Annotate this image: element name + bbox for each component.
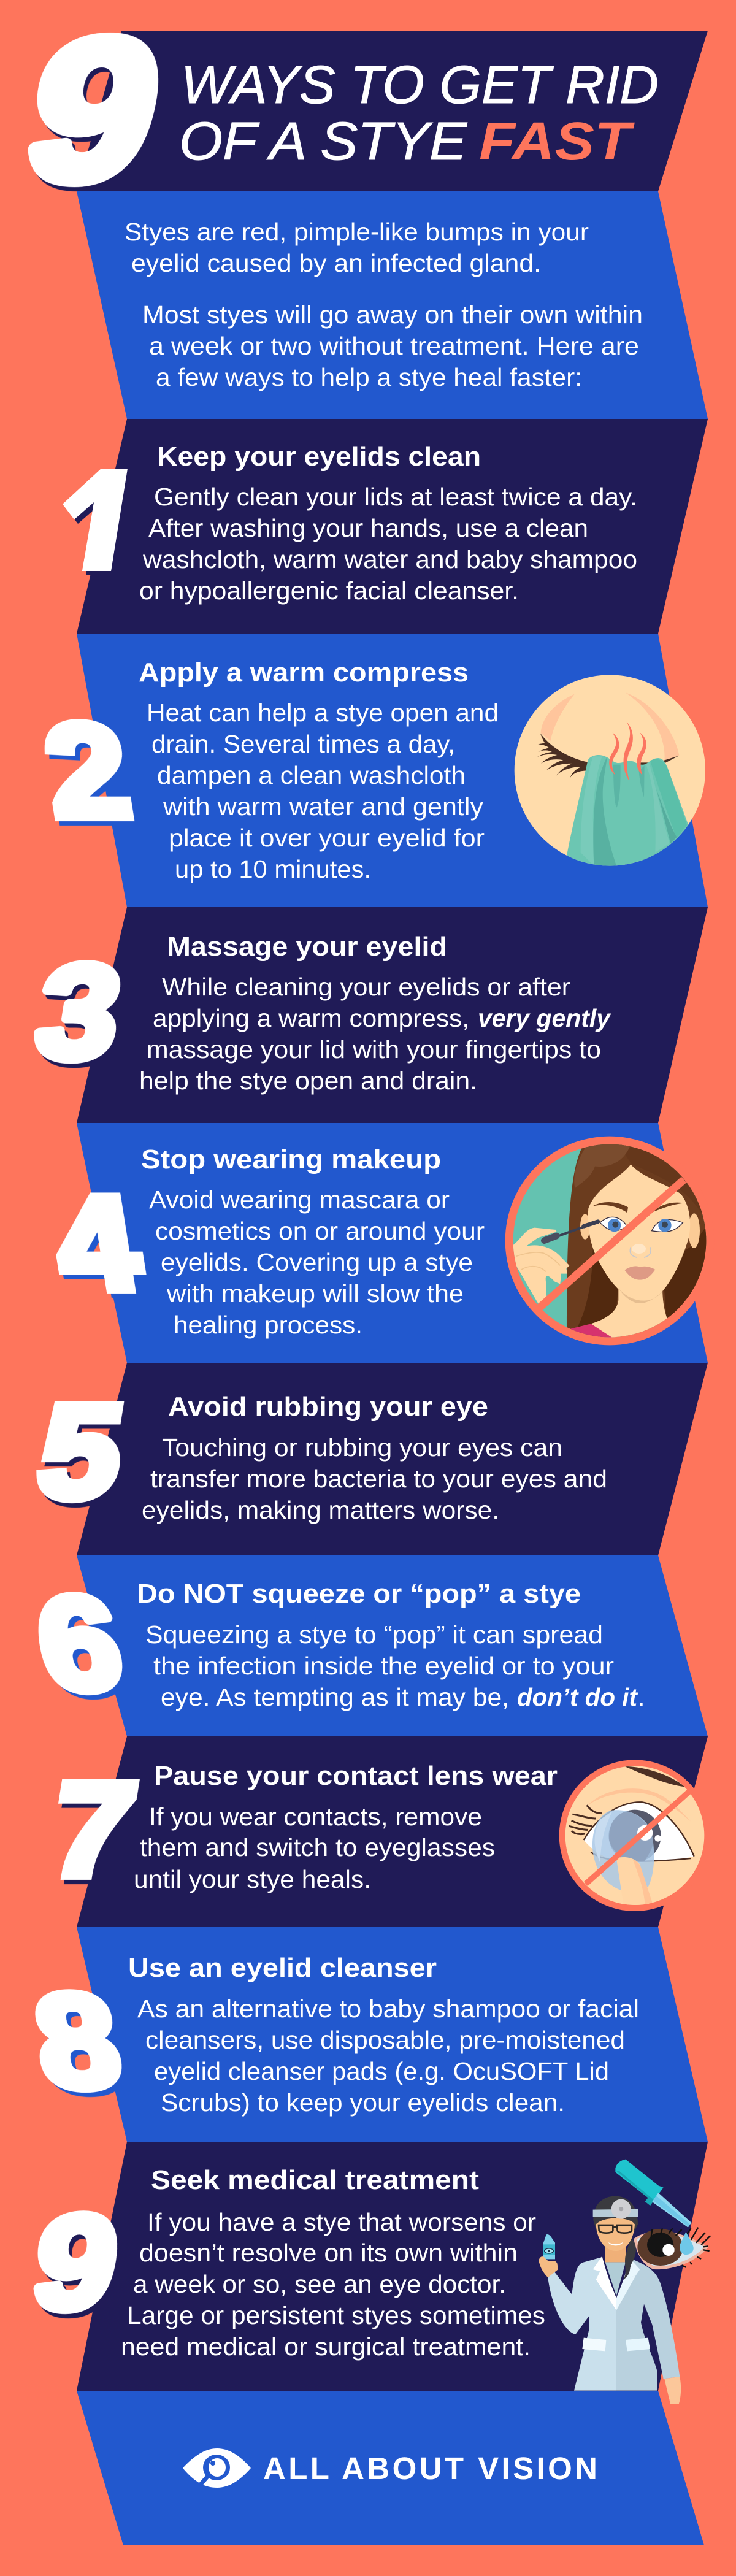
heading 8: Use an eyelid cleanser (128, 1953, 437, 1983)
body 7: If you wear contacts, remove (149, 1803, 482, 1831)
body 1: washcloth, warm water and baby shampoo (142, 545, 637, 573)
number 5: 5 (29, 1377, 132, 1525)
title (179, 55, 659, 171)
heading 1: Keep your eyelids clean (157, 442, 481, 472)
body 1: Gently clean your lids at least twice a day. (154, 483, 637, 511)
body 6: don’t do it (517, 1683, 638, 1711)
title number 9: 9 (10, 0, 179, 221)
body 3: While cleaning your eyelids or after (162, 973, 570, 1001)
body 6: Squeezing a stye to “pop” it can spread (145, 1620, 603, 1649)
panel: footer (77, 2391, 704, 2545)
body 3: massage your lid with your fingertips to (147, 1035, 601, 1064)
body 8 (137, 1995, 639, 2117)
body 7: them and switch to eyeglasses (140, 1833, 495, 1861)
panel: introduction (77, 191, 708, 419)
panel: step 1 (41, 419, 708, 634)
body 3 (139, 973, 611, 1095)
intro text: eyelid caused by an infected gland. (131, 249, 541, 277)
body 4: with makeup will slow the (166, 1279, 464, 1308)
panel: step 8 (26, 1927, 708, 2142)
number 9: 9 (25, 2188, 128, 2336)
body 5: transfer more bacteria to your eyes and (150, 1465, 607, 1493)
body 1: After washing your hands, use a clean (148, 514, 588, 542)
body 6 (145, 1620, 645, 1711)
body 4: healing process. (174, 1311, 362, 1339)
icon: warm compress on eyelid (515, 675, 705, 867)
logo wordmark: ALL ABOUT VISION (263, 2451, 597, 2486)
body 7 (134, 1803, 495, 1893)
body 9: need medical or surgical treatment. (121, 2333, 531, 2361)
body 5 (142, 1433, 607, 1524)
body 1 (139, 483, 637, 605)
body 1: or hypoallergenic facial cleanser. (139, 577, 519, 605)
panel: step 4 (45, 1123, 714, 1363)
body 7: until your stye heals. (134, 1865, 371, 1893)
panel: title banner (10, 0, 708, 221)
panel: step 3 (28, 907, 708, 1123)
number 3: 3 (28, 937, 131, 1086)
number 4: 4 (45, 1168, 148, 1317)
body 4: Avoid wearing mascara or (149, 1186, 450, 1214)
body 3: help the stye open and drain. (139, 1067, 477, 1095)
heading 4: Stop wearing makeup (141, 1144, 441, 1175)
intro text (125, 218, 643, 391)
title: FAST (479, 112, 635, 171)
body 2: place it over your eyelid for (169, 824, 485, 852)
panel: step 7 (42, 1736, 710, 1927)
body 2: with warm water and gently (163, 792, 484, 821)
heading 6: Do NOT squeeze or “pop” a stye (137, 1579, 581, 1609)
number 8: 8 (26, 1966, 129, 2115)
body 8: Scrubs) to keep your eyelids clean. (161, 2088, 565, 2117)
number 1: 1 (41, 430, 158, 608)
body 4 (149, 1186, 485, 1339)
body 9: a week or so, see an eye doctor. (133, 2270, 506, 2298)
body 6: eye. As tempting as it may be, (161, 1683, 509, 1711)
body 9: Large or persistent styes sometimes (127, 2301, 545, 2329)
title: WAYS TO GET RID (181, 55, 659, 115)
body 8: eyelid cleanser pads (e.g. OcuSOFT Lid (154, 2057, 609, 2085)
panel: step 5 (29, 1363, 708, 1555)
panel: step 9 (25, 2142, 710, 2404)
body 2: up to 10 minutes. (175, 855, 371, 883)
title: OF A STYE (179, 112, 467, 171)
intro text: a week or two without treatment. Here are (149, 332, 639, 360)
body 4: cosmetics on or around your (155, 1217, 485, 1245)
number 7: 7 (42, 1755, 145, 1903)
icon: no makeup, woman applying mascara (505, 1137, 714, 1345)
icon: no contact lens (559, 1760, 710, 1911)
body 9 (121, 2208, 545, 2361)
heading 9: Seek medical treatment (151, 2165, 479, 2195)
heading 5: Avoid rubbing your eye (168, 1392, 488, 1422)
body 2: Heat can help a stye open and (147, 699, 499, 727)
body 2: dampen a clean washcloth (157, 761, 466, 789)
body 2: drain. Several times a day, (151, 730, 455, 758)
icon: eye doctor with eye dropper (539, 2160, 710, 2404)
heading 3: Massage your eyelid (167, 932, 447, 962)
body 2 (147, 699, 499, 883)
body 8: cleansers, use disposable, pre-moistened (145, 2026, 625, 2054)
body 9: If you have a stye that worsens or (147, 2208, 536, 2236)
body 3: very gently (478, 1004, 611, 1032)
panel: step 2 (36, 634, 708, 907)
panel: step 6 (28, 1555, 708, 1736)
heading 2: Apply a warm compress (139, 657, 469, 688)
body 3: applying a warm compress, (153, 1004, 469, 1032)
number 6: 6 (28, 1569, 131, 1717)
body 4: eyelids. Covering up a stye (161, 1248, 473, 1276)
body 5: eyelids, making matters worse. (142, 1496, 499, 1524)
body 8: As an alternative to baby shampoo or facial (137, 1995, 639, 2023)
heading 7: Pause your contact lens wear (154, 1761, 558, 1791)
logo: All About Vision eye icon (183, 2448, 251, 2488)
intro text: a few ways to help a stye heal faster: (156, 363, 582, 391)
body 6: the infection inside the eyelid or to your (153, 1652, 614, 1680)
body 6: . (638, 1683, 645, 1711)
body 5: Touching or rubbing your eyes can (162, 1433, 562, 1462)
intro text: Styes are red, pimple-like bumps in your (125, 218, 589, 246)
intro text: Most styes will go away on their own within (142, 301, 643, 329)
body 9: doesn’t resolve on its own within (139, 2239, 518, 2267)
number 2: 2 (36, 696, 139, 845)
